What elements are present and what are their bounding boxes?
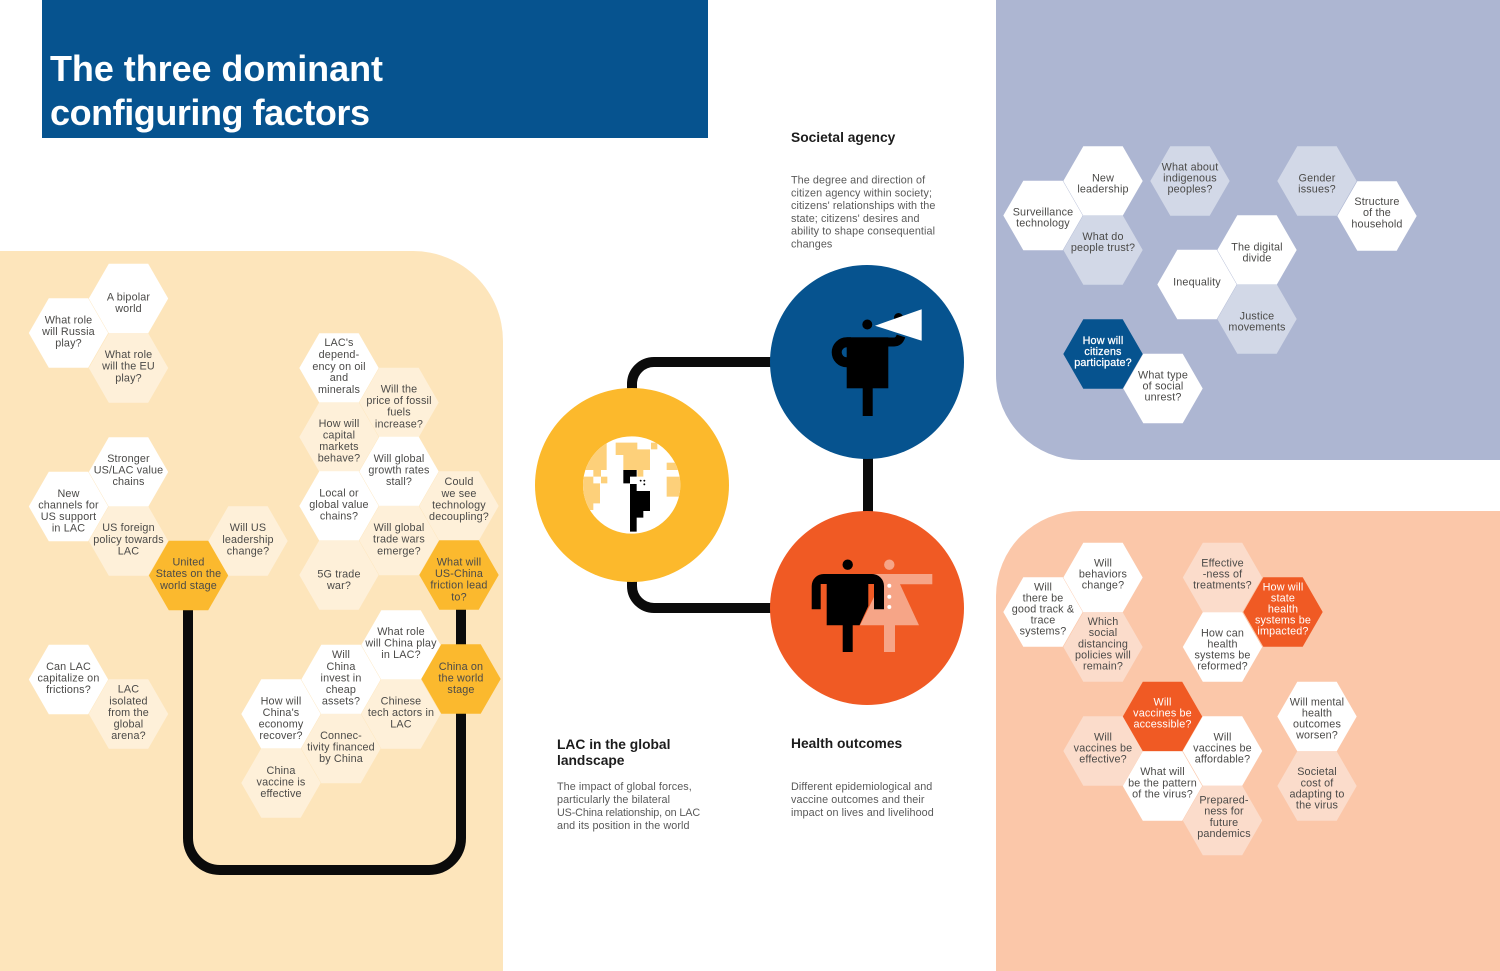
icon: woman figure xyxy=(860,560,932,652)
hex: Capital markets xyxy=(299,402,379,472)
hex: Surveillance technology: technology xyxy=(1016,218,1070,230)
hex: Technology decoupling: decoupling? xyxy=(429,511,489,523)
text block: Health outcomes: impact on lives and livelihood xyxy=(791,807,934,819)
hex: Inequality xyxy=(1157,250,1237,319)
hex: State health systems impacted: How will xyxy=(1263,582,1303,594)
hex: Technology decoupling: Could xyxy=(445,476,473,488)
hex: Vaccines effective: vaccines be xyxy=(1074,742,1132,754)
hex: Preparedness for pandemics xyxy=(1183,786,1262,855)
hex: Global trade wars: emerge? xyxy=(377,546,421,558)
hex: Health systems reformed: How can xyxy=(1201,628,1244,640)
hex: New channels: channels for xyxy=(38,500,99,512)
hex: US-China friction: US-China xyxy=(435,568,483,580)
hex: Track and trace xyxy=(1003,577,1083,647)
hex: China's economy: How will xyxy=(261,696,301,708)
hex: Global growth: stall? xyxy=(386,476,412,488)
hex: EU: What role xyxy=(105,349,152,361)
hex: Global trade wars: trade wars xyxy=(373,534,425,546)
hex: What do people trust: What do xyxy=(1082,231,1124,243)
connector: US to China loop xyxy=(188,590,461,870)
hex: Connectivity financed by China: Connec- xyxy=(320,730,362,742)
hex: Social unrest xyxy=(1123,354,1203,423)
connectors between the three circles xyxy=(632,362,868,608)
text block: Societal agency: Societal agency xyxy=(791,130,896,145)
hex: A bipolar world xyxy=(89,264,168,333)
icon: pixel globe xyxy=(582,436,682,534)
hex: Connectivity financed by China xyxy=(301,714,381,783)
hex: Societal cost xyxy=(1277,751,1357,821)
hex: How will citizens participate: How will xyxy=(1083,335,1123,347)
icon: person with megaphone xyxy=(837,309,922,416)
hex: Pattern of the virus: be the pattern xyxy=(1128,778,1197,790)
hex: New leadership xyxy=(1063,146,1143,216)
hex: Surveillance technology: Surveillance xyxy=(1013,206,1073,218)
hex: Chinese tech actors xyxy=(361,679,441,749)
hex: Role of China: will China play xyxy=(364,638,437,650)
hex: Value chains: global value xyxy=(309,499,369,511)
hex: Chinese tech actors: tech actors in xyxy=(368,707,434,719)
hex: United States on the world stage: States on the xyxy=(156,568,221,580)
hex: New channels xyxy=(29,472,108,541)
hex: EU: will the EU xyxy=(101,360,155,372)
hex: Digital divide: The digital xyxy=(1231,242,1283,254)
hex: Structure of the household xyxy=(1337,181,1417,251)
title banner: The three dominant xyxy=(50,48,383,89)
hex: Digital divide: divide xyxy=(1242,252,1272,264)
hex: Pattern of the virus: What will xyxy=(1140,766,1185,778)
hex: Track and trace: there be xyxy=(1023,592,1063,604)
text block: Health outcomes: vaccine outcomes and their xyxy=(791,794,925,806)
text block: Societal agency: citizens' relationships with the xyxy=(791,200,935,212)
text block: Health outcomes: Different epidemiological and xyxy=(791,781,932,793)
hex: Social unrest: of social xyxy=(1143,380,1183,392)
hex: Stronger value chains: chains xyxy=(112,476,145,488)
hex: Capital markets: How will xyxy=(319,418,359,430)
icon: woman's buttons xyxy=(887,584,891,609)
icon: man figure xyxy=(812,560,884,652)
hex: Societal cost: cost of xyxy=(1301,778,1334,790)
hex: Societal cost: the virus xyxy=(1296,800,1339,812)
hex: Behaviors change: Will xyxy=(1094,558,1112,570)
hex: China on the world stage: stage xyxy=(447,684,475,696)
hex: US-China friction xyxy=(419,540,499,610)
hex: Vaccines effective: effective? xyxy=(1079,754,1127,766)
hex: US-China friction: friction lead xyxy=(430,580,488,592)
text block: Societal agency: changes xyxy=(791,238,833,250)
text block: LAC in the global landscape: US-China relationship, on LAC xyxy=(557,807,700,819)
hex: Effectiveness of treatments: treatments? xyxy=(1193,580,1252,592)
panel: LAC in the global landscape questions xyxy=(0,251,503,971)
hex: China on the world stage: China on xyxy=(439,661,483,673)
hex: Justice movements: movements xyxy=(1228,322,1286,334)
hex: Role of China xyxy=(361,610,441,680)
hex: Track and trace: good track & xyxy=(1012,604,1075,616)
hex: China vaccine: China xyxy=(267,765,295,777)
hex: Global trade wars xyxy=(359,506,439,575)
hex: China vaccine: vaccine is xyxy=(257,776,306,788)
hex: Will US leadership change: leadership xyxy=(222,534,274,546)
hex: Price of fossil fuels: increase? xyxy=(375,418,423,430)
text block: LAC in the global landscape: and its position in the world xyxy=(557,820,690,832)
hex: Health systems reformed: reformed? xyxy=(1197,660,1248,672)
hex: LAC isolated: from the xyxy=(108,707,149,719)
hex: LAC capitalize on frictions: Can LAC xyxy=(46,661,91,673)
circle: LAC in the global landscape with globe xyxy=(535,388,729,582)
hex: Role of China: in LAC? xyxy=(381,649,421,661)
text block: LAC in the global landscape xyxy=(557,737,700,832)
hex: Russia: play? xyxy=(55,338,82,350)
hex: Social distancing: policies will xyxy=(1075,650,1131,662)
hex: Global growth: Will global xyxy=(374,453,424,465)
hex: Price of fossil fuels: price of fossil xyxy=(366,395,432,407)
hex: Value chains xyxy=(299,471,379,541)
hex: US-China friction: What will xyxy=(437,556,481,568)
hex: Structure of the household: household xyxy=(1351,218,1403,230)
text block: LAC in the global landscape: particularly the bilateral xyxy=(557,794,670,806)
hex: Social unrest: What type xyxy=(1138,370,1188,382)
hex: LAC's dependency: and xyxy=(330,372,348,384)
hex: What do people trust: people trust? xyxy=(1071,242,1135,254)
hex: Price of fossil fuels: fuels xyxy=(387,406,411,418)
hex: Vaccines effective: Will xyxy=(1094,732,1112,744)
hex: Pattern of the virus xyxy=(1123,751,1202,821)
hex: New leadership: New xyxy=(1092,172,1114,184)
hex: How will citizens participate: participate? xyxy=(1074,357,1132,369)
hex: Technology decoupling: technology xyxy=(432,500,486,512)
hex: US foreign policy: policy towards xyxy=(93,534,164,546)
hex: Preparedness for pandemics: Prepared- xyxy=(1199,794,1249,806)
text block: Societal agency: state; citizens' desires and xyxy=(791,213,920,225)
hex: Health systems reformed: health xyxy=(1207,638,1238,650)
hex: Effectiveness of treatments: Effective xyxy=(1201,558,1244,570)
panel: Societal agency questions xyxy=(996,0,1500,460)
hex: Capital markets: capital xyxy=(323,430,355,442)
hex: LAC's dependency xyxy=(299,333,379,403)
hex: China vaccine: effective xyxy=(260,788,302,800)
hex: Indigenous peoples: What about xyxy=(1162,162,1218,174)
hex: China vaccine xyxy=(241,748,321,818)
hex: Effectiveness of treatments: -ness of xyxy=(1203,568,1243,580)
text block: LAC in the global landscape: landscape xyxy=(557,753,625,768)
hex: Indigenous peoples: indigenous xyxy=(1163,172,1217,184)
hex: Technology decoupling xyxy=(419,471,499,541)
hex: LAC isolated: LAC xyxy=(118,684,139,696)
hex: Structure of the household: Structure xyxy=(1354,196,1400,208)
text block: Societal agency: ability to shape consequential xyxy=(791,226,935,238)
hex: State health systems impacted xyxy=(1243,577,1323,647)
hex: Chinese tech actors: LAC xyxy=(390,718,412,730)
hex: Indigenous peoples xyxy=(1150,146,1230,216)
hex: Vaccines accessible: vaccines be xyxy=(1133,708,1192,720)
hex: Stronger value chains: US/LAC value xyxy=(94,464,163,476)
hex: EU xyxy=(89,333,168,403)
hex: LAC capitalize on frictions: capitalize on xyxy=(38,672,99,684)
hex: Vaccines affordable: vaccines be xyxy=(1193,742,1252,754)
hex: Track and trace: Will xyxy=(1034,582,1052,594)
text block: Health outcomes xyxy=(791,736,934,819)
circle: Health outcomes with man and woman xyxy=(770,511,964,705)
hex: China's economy: China's xyxy=(263,707,300,719)
text block: Health outcomes: Health outcomes xyxy=(791,736,902,751)
hex: State health systems impacted: state xyxy=(1271,592,1295,604)
hex: What do people trust xyxy=(1063,215,1143,285)
text block: Societal agency xyxy=(791,130,935,250)
hex: China investment xyxy=(301,645,381,714)
hex: Track and trace: systems? xyxy=(1020,626,1066,638)
hex: LAC isolated: arena? xyxy=(111,730,146,742)
hex: How will citizens participate: citizens xyxy=(1084,346,1122,358)
hex: Connectivity financed by China: tivity financed xyxy=(307,742,375,754)
hex: Vaccines accessible: accessible? xyxy=(1133,718,1192,730)
hex: Mental health: Will mental xyxy=(1290,696,1344,708)
hex: Gender issues: Gender xyxy=(1299,172,1336,184)
hex: Global growth: growth rates xyxy=(368,464,430,476)
hex: Role of China: What role xyxy=(377,626,425,638)
hex: China investment: assets? xyxy=(322,696,360,708)
hex: Value chains: Local or xyxy=(319,488,359,500)
hex: Vaccines accessible: Will xyxy=(1154,696,1172,708)
hex: Value chains: chains? xyxy=(320,510,358,522)
hex: China's economy: recover? xyxy=(259,730,303,742)
hex: Behaviors change: change? xyxy=(1082,580,1124,592)
hex: Social distancing: Which xyxy=(1088,616,1118,628)
hex: Mental health: health xyxy=(1302,708,1332,720)
hex: Mental health: worsen? xyxy=(1295,730,1338,742)
hex: State health systems impacted: impacted? xyxy=(1257,626,1309,638)
hex: Price of fossil fuels: Will the xyxy=(381,384,417,396)
hex: Social distancing: distancing xyxy=(1078,638,1128,650)
hex: Gender issues xyxy=(1277,146,1357,216)
hex: Will US leadership change xyxy=(208,506,288,576)
hex: A bipolar world: world xyxy=(114,303,142,315)
hex: Effectiveness of treatments xyxy=(1183,543,1262,612)
hex: Pattern of the virus: of the virus? xyxy=(1132,788,1193,800)
hex: 5G trade war: 5G trade xyxy=(317,568,361,580)
hex: United States on the world stage: world stage xyxy=(159,580,217,592)
hex: China's economy xyxy=(241,679,321,749)
hex: US foreign policy xyxy=(89,506,168,576)
hex: New channels: in LAC xyxy=(52,522,85,534)
hex: United States on the world stage: United xyxy=(172,556,205,568)
hex: LAC isolated: isolated xyxy=(109,696,148,708)
hex: Social distancing xyxy=(1063,612,1143,682)
hex: Will US leadership change: Will US xyxy=(230,522,266,534)
hex: Russia: What role xyxy=(45,314,92,326)
text block: Societal agency: The degree and direction of xyxy=(791,174,926,186)
hex: Price of fossil fuels xyxy=(359,368,439,437)
hex: Preparedness for pandemics: pandemics xyxy=(1197,828,1251,840)
hex: China investment: cheap xyxy=(326,684,356,696)
hex: LAC capitalize on frictions: frictions? xyxy=(46,684,91,696)
hex: Vaccines affordable: Will xyxy=(1214,732,1232,744)
hex: Preparedness for pandemics: ness for xyxy=(1204,806,1244,818)
hex: Justice movements: Justice xyxy=(1240,310,1274,322)
hex: China investment: Will xyxy=(332,649,350,661)
hex: Structure of the household: of the xyxy=(1363,207,1391,219)
hex: State health systems impacted: health xyxy=(1268,604,1298,616)
hex: LAC capitalize on frictions xyxy=(29,645,108,714)
hex: Stronger value chains xyxy=(89,437,168,507)
hex: Vaccines affordable: affordable? xyxy=(1195,754,1250,766)
hex: Social distancing: remain? xyxy=(1083,660,1123,672)
hex: Health systems reformed: systems be xyxy=(1194,650,1251,662)
hex: Societal cost: adapting to xyxy=(1289,788,1345,800)
hex: Societal cost: Societal xyxy=(1297,766,1337,778)
hex: Stronger value chains: Stronger xyxy=(107,453,150,465)
hex: Mental health: outcomes xyxy=(1293,718,1341,730)
hex: Vaccines effective xyxy=(1063,716,1143,786)
hex: Technology decoupling: we see xyxy=(440,488,477,500)
hex: 5G trade war: war? xyxy=(326,580,351,592)
hex: Health systems reformed xyxy=(1183,612,1262,682)
hex: LAC isolated: global xyxy=(114,718,143,730)
hex: How will citizens participate xyxy=(1063,319,1143,389)
hex: Preparedness for pandemics: future xyxy=(1210,817,1238,829)
hex: Capital markets: behave? xyxy=(318,452,360,464)
hex: China on the world stage xyxy=(421,644,501,714)
hex: China on the world stage: the world xyxy=(438,672,484,684)
hex: Social unrest: unrest? xyxy=(1144,392,1182,404)
text block: LAC in the global landscape: LAC in the global xyxy=(557,737,670,752)
hex: Surveillance technology xyxy=(1003,181,1083,250)
text block: Societal agency: citizen agency within society; xyxy=(791,188,932,200)
hex: Digital divide xyxy=(1217,215,1297,285)
hex: Russia xyxy=(29,298,108,368)
hex: A bipolar world: A bipolar xyxy=(107,292,150,304)
hex: EU: play? xyxy=(115,372,142,384)
hex: Vaccines accessible xyxy=(1123,682,1202,751)
hex: Behaviors change xyxy=(1063,543,1143,612)
hex: China's economy: economy xyxy=(259,718,304,730)
hex: State health systems impacted: systems be xyxy=(1255,614,1311,626)
hex: LAC isolated xyxy=(89,679,168,749)
hex: New channels: US support xyxy=(41,511,96,523)
hex: New leadership: leadership xyxy=(1077,184,1129,196)
hex: Justice movements xyxy=(1217,284,1297,354)
hex: China investment: invest in xyxy=(321,672,361,684)
hex: Vaccines affordable xyxy=(1183,716,1262,786)
hex: Social distancing: social xyxy=(1089,627,1117,639)
hex: Track and trace: trace xyxy=(1031,614,1055,626)
hex: LAC's dependency: minerals xyxy=(318,384,360,396)
circle: Societal agency with megaphone figure xyxy=(770,265,964,459)
hex: US foreign policy: LAC xyxy=(118,546,139,558)
hex: LAC's dependency: ency on oil xyxy=(312,361,366,373)
hex: LAC's dependency: LAC's xyxy=(324,337,354,349)
hex: Chinese tech actors: Chinese xyxy=(381,696,421,708)
hex: Global trade wars: Will global xyxy=(374,522,424,534)
hex: Gender issues: issues? xyxy=(1298,184,1336,196)
hex: Will US leadership change: change? xyxy=(227,546,269,558)
hex: Connectivity financed by China: by China xyxy=(319,753,363,765)
hex: Mental health xyxy=(1277,682,1357,751)
hex: LAC's dependency: depend- xyxy=(319,349,360,361)
hex: US foreign policy: US foreign xyxy=(102,522,155,534)
title banner xyxy=(42,0,708,138)
title banner: configuring factors xyxy=(50,92,370,133)
hex: Global growth xyxy=(359,437,439,506)
hex: Behaviors change: behaviors xyxy=(1079,568,1128,580)
hex: US-China friction: to? xyxy=(451,592,467,604)
hex: Capital markets: markets xyxy=(319,441,359,453)
hex: 5G trade war xyxy=(299,540,379,610)
panel: Health outcomes questions xyxy=(996,511,1500,971)
hex: Inequality: Inequality xyxy=(1173,276,1221,288)
hex: China investment: China xyxy=(327,661,355,673)
hex: Indigenous peoples: peoples? xyxy=(1167,184,1213,196)
text block: LAC in the global landscape: The impact of global forces, xyxy=(557,781,692,793)
hex: New channels: New xyxy=(57,488,80,500)
hex: United States on the world stage xyxy=(149,541,228,610)
hex: Russia: will Russia xyxy=(41,326,95,338)
